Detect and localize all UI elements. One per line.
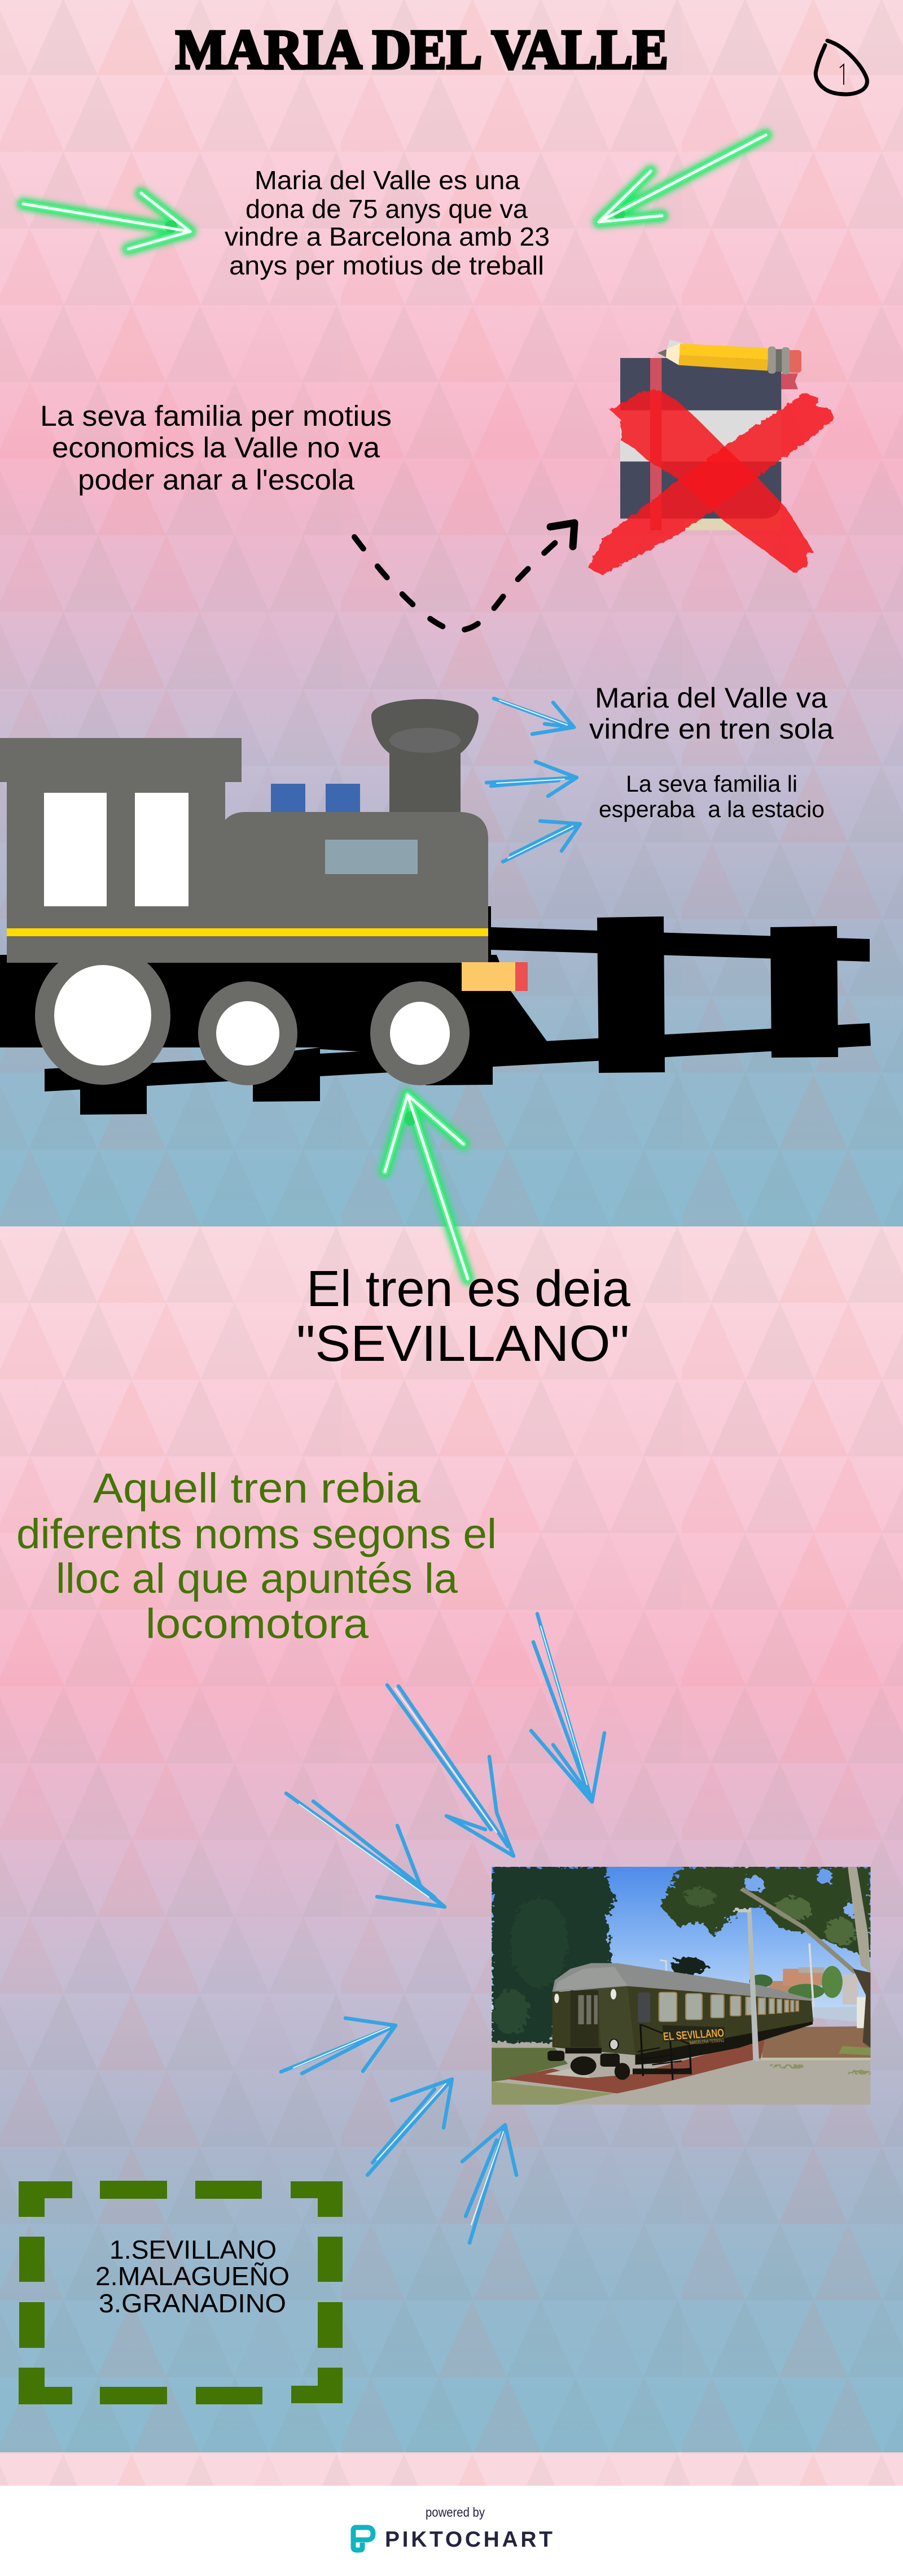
text block: family and school: La seva familia per motius: [40, 400, 392, 432]
arrow: blue up right three: [462, 2125, 516, 2243]
text block: list of train names: 2.MALAGUEÑO: [95, 2261, 290, 2291]
text block: introduction: [225, 165, 550, 280]
arrow: green left: [23, 193, 190, 249]
text block: introduction: anys per motius de treball: [229, 251, 544, 280]
front wheel: [370, 981, 470, 1085]
boiler plate: [325, 840, 418, 874]
palm: [672, 1958, 707, 1976]
yellow stripe: [7, 928, 488, 936]
boiler: [225, 812, 488, 963]
photo: El Sevillano railcar: [492, 1867, 870, 2105]
railcar sign: EL SEVILLANO: [663, 2027, 725, 2043]
arrow: blue down right one: [387, 1685, 514, 1856]
arrow: green right: [599, 135, 766, 222]
powered by: powered by: [426, 2505, 485, 2520]
text block: green explanation: [16, 1465, 497, 1647]
fence: [813, 2007, 857, 2021]
railcar undercarriage: [547, 2021, 813, 2080]
text block: travelled alone: vindre en tren sola: [589, 713, 834, 745]
light pole: [746, 1867, 759, 2061]
tree canopy: [661, 1867, 870, 1958]
title: MARIA DEL VALLE: [176, 18, 668, 81]
icon: piktochart logo: [353, 2527, 373, 2550]
arrow: dashed black curve: [354, 523, 575, 630]
icon: hand drawn number one: [816, 41, 867, 94]
text block: green explanation: locomotora: [146, 1600, 369, 1647]
railcar stairs: [638, 2024, 691, 2080]
arrow: blue down right three: [286, 1793, 445, 1907]
arrow: blue up right two: [367, 2079, 452, 2175]
cypress tree: [492, 1867, 616, 2042]
boiler domes: [271, 784, 305, 812]
notebook ribbon: [781, 373, 798, 389]
text block: travelled alone: [589, 682, 834, 745]
footer: piktochart credit: [353, 2505, 553, 2552]
photo: El Sevillano railcar: BARCELONA-TERMINO: [689, 2038, 725, 2046]
footer background: [0, 2486, 903, 2576]
frame: dashed green box: [19, 2181, 343, 2404]
text block: list of train names: [95, 2235, 290, 2318]
arrow: green pointing to wheel: [385, 1095, 468, 1279]
middle wheel: [198, 981, 297, 1085]
panel: lower background: [0, 1226, 903, 2452]
text block: green explanation: Aquell tren rebia: [93, 1465, 421, 1512]
text block: family and school: economics la Valle no va: [52, 431, 380, 464]
rails: [45, 906, 871, 1115]
railcar sign: [663, 2025, 725, 2046]
ground: [492, 2038, 870, 2105]
text block: introduction: Maria del Valle es una: [255, 165, 520, 195]
text block: family and school: poder anar a l'escola: [78, 464, 355, 496]
cab roof: [0, 738, 242, 782]
railcar body: [553, 1986, 813, 2055]
chimney: [371, 699, 479, 812]
railcar door: [571, 1990, 598, 2047]
heading: train name: "SEVILLANO": [296, 1316, 629, 1372]
panel: closing pink band: [0, 2452, 903, 2486]
railcar lamps: [611, 1989, 616, 1999]
notebook label: [620, 411, 781, 461]
text block: introduction: dona de 75 anys que va: [246, 194, 528, 224]
large wheel: [35, 946, 170, 1085]
red watercolour X: [588, 390, 834, 575]
text block: family waiting: esperaba a la estacio: [599, 796, 825, 822]
arrow: blue up right one: [281, 2018, 396, 2073]
lamp: [462, 962, 515, 991]
wordmark: PIKTOCHART: [385, 2527, 553, 2552]
text block: list of train names: 3.GRANADINO: [99, 2289, 286, 2318]
sky: [492, 1867, 870, 2018]
text block: green explanation: diferents noms segons el: [16, 1510, 497, 1557]
text block: travelled alone: Maria del Valle va: [595, 682, 827, 714]
tree trunk: [742, 1867, 870, 2048]
notebook pages: [685, 497, 781, 530]
cab: [7, 782, 225, 963]
text block: family waiting: La seva familia li: [626, 771, 797, 797]
panel: upper background: [0, 0, 903, 1226]
text block: family and school: [40, 400, 392, 496]
notebook cover: [620, 358, 781, 518]
railcar roof: [553, 1963, 813, 2002]
notebook band: [650, 358, 661, 530]
undercarriage: [0, 955, 547, 1063]
heading: train name: El tren es deia: [306, 1261, 631, 1317]
railcar windows: [659, 1992, 799, 2021]
arrow: blue to text three: [503, 821, 580, 862]
arrow: blue to text two: [486, 762, 577, 796]
icon: crossed out notebook and pencil: [588, 340, 834, 575]
white post: [857, 1997, 866, 2028]
text block: family waiting: [599, 771, 825, 822]
text block: introduction: vindre a Barcelona amb 23: [225, 222, 550, 251]
cab windows: [44, 793, 107, 906]
arrow: blue to text one: [494, 698, 574, 734]
text block: list of train names: 1.SEVILLANO: [109, 2235, 277, 2264]
arrow: blue down right two: [531, 1614, 604, 1802]
pencil: [657, 340, 801, 374]
background buildings: [749, 1966, 858, 2005]
text block: green explanation: lloc al que apuntés la: [56, 1555, 458, 1602]
illustration: steam locomotive: [0, 699, 871, 1115]
heading: train name: [296, 1261, 631, 1372]
